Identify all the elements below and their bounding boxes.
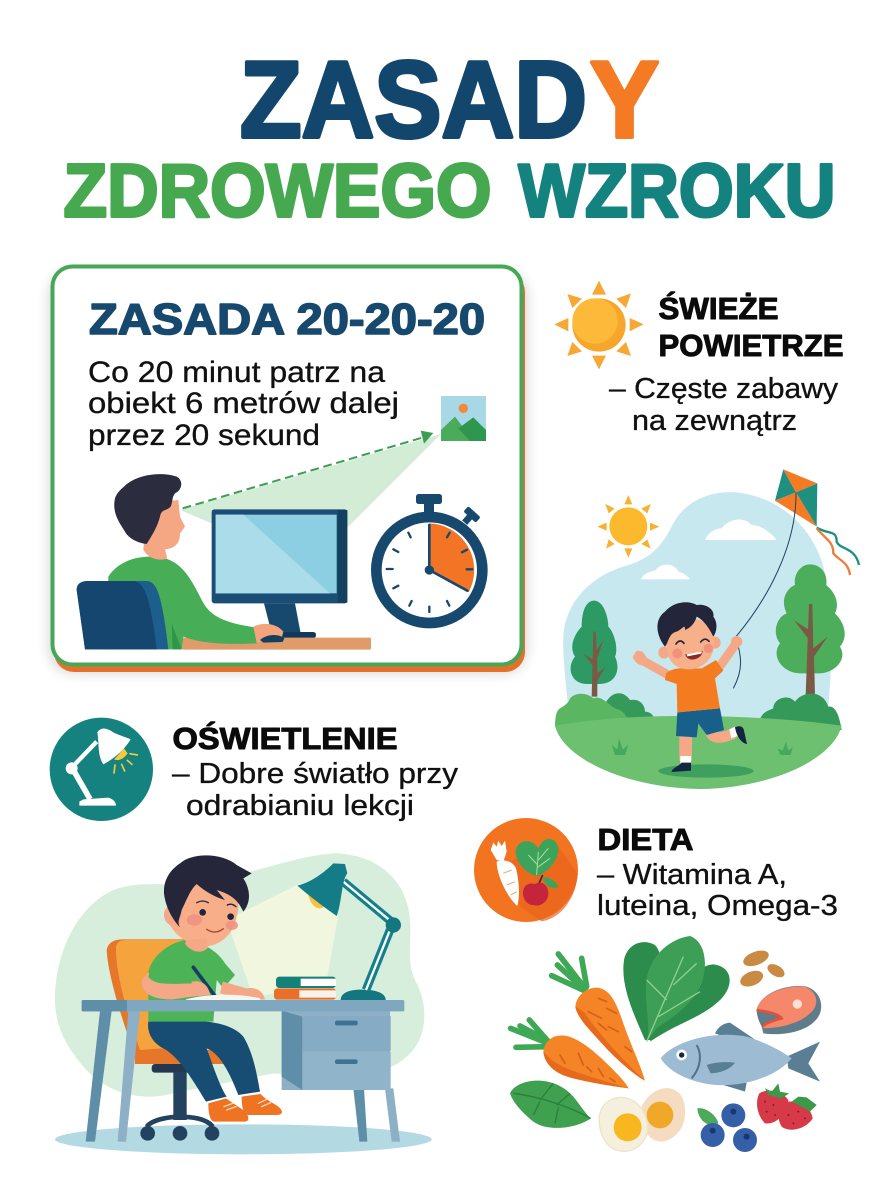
- strawberries: [757, 1083, 817, 1130]
- almonds: [738, 948, 787, 990]
- text: diet description: luteina, Omega-3: [597, 890, 838, 922]
- background blob: [55, 853, 424, 1097]
- boy: [633, 602, 747, 772]
- bushes: [555, 693, 842, 730]
- chair: [77, 581, 168, 649]
- spinach: [623, 936, 730, 1042]
- icon: landscape picture: [441, 396, 486, 441]
- heading: swieze powietrze: POWIETRZE: [658, 328, 844, 363]
- fish: [661, 1023, 820, 1092]
- title: Y: [590, 39, 659, 161]
- text: lighting description: [172, 758, 459, 822]
- tree left: [571, 601, 617, 697]
- blueberries: [697, 1103, 757, 1152]
- panel: zasada 20-20-20: [50, 266, 526, 672]
- floor shadow: [55, 1124, 432, 1154]
- desk lamp: [297, 863, 401, 1000]
- icon: diet vegetables: [474, 818, 578, 922]
- light beam: [227, 883, 338, 998]
- text: lighting description: odrabianiu lekcji: [186, 790, 414, 822]
- title: ZDROWEGO: [64, 148, 492, 232]
- text: fresh air description: [609, 373, 839, 437]
- monitor: [212, 509, 347, 638]
- stopwatch: [371, 494, 488, 628]
- tree right: [776, 564, 845, 695]
- vision cone: [180, 434, 441, 527]
- text: instruction: obiekt 6 metrów dalej: [88, 387, 399, 420]
- heading: dieta: DIETA: [598, 822, 694, 857]
- text: diet description: [597, 859, 838, 922]
- text: fresh air description: na zewnątrz: [632, 405, 797, 437]
- heading: oswietlenie: OŚWIETLENIE: [172, 720, 398, 756]
- sky blob: [563, 492, 831, 723]
- book on desk: [186, 995, 260, 1000]
- title: ZASAD: [240, 39, 587, 161]
- boy: [142, 855, 282, 1122]
- text: lighting description: – Dobre światło przy: [172, 758, 459, 790]
- text: instruction: [88, 356, 399, 452]
- carrots: [543, 988, 645, 1088]
- shadow: [658, 764, 754, 778]
- person: [107, 474, 284, 649]
- illustration: healthy food: [510, 936, 821, 1152]
- illustration: person at a computer with sight line and stopwatch: [77, 396, 488, 650]
- clouds: [641, 519, 777, 579]
- text: instruction: Co 20 minut patrz na: [88, 356, 385, 389]
- heading: swieze powietrze: [658, 290, 844, 363]
- text: diet description: – Witamina A,: [597, 859, 787, 891]
- books: [274, 977, 336, 1000]
- desk: [182, 638, 371, 650]
- kite: [733, 469, 859, 688]
- dashed arrow: [183, 431, 433, 508]
- eggs: [599, 1088, 685, 1151]
- icon: desk lamp: [50, 718, 153, 821]
- desk: [82, 1000, 404, 1142]
- illustration: boy studying at a desk: [55, 853, 432, 1154]
- text: instruction: przez 20 sekund: [88, 419, 320, 452]
- leaf: [510, 1081, 591, 1128]
- sun: [597, 495, 659, 558]
- chair: [107, 939, 228, 1141]
- icon: sun (fresh air): [554, 281, 644, 369]
- heading: swieze powietrze: ŚWIEŻE: [658, 290, 778, 326]
- title: [64, 39, 836, 232]
- ground: [555, 716, 842, 789]
- grass tufts: [612, 738, 793, 755]
- carrot tops: [511, 954, 587, 1047]
- salmon steak: [757, 986, 821, 1034]
- heading: zasada 20-20-20: ZASADA 20-20-20: [89, 295, 485, 344]
- title: WZROKU: [518, 148, 836, 232]
- illustration: boy flying a kite: [555, 469, 859, 789]
- text: fresh air description: – Częste zabawy: [609, 373, 839, 405]
